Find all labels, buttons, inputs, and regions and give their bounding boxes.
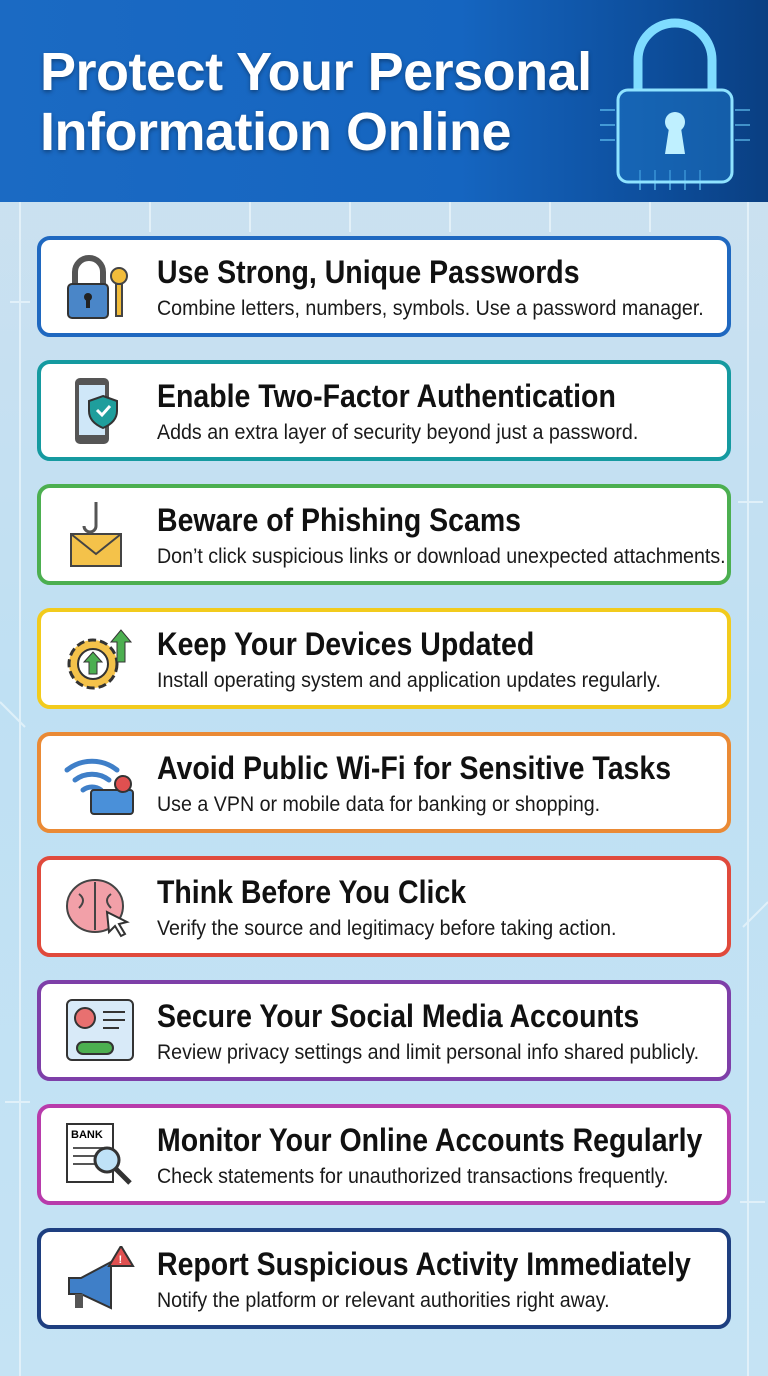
card 3: phishing <box>37 484 731 585</box>
icon: gear with arrows <box>68 629 132 690</box>
icon: wifi and card <box>64 758 134 815</box>
heading: Monitor Your Online Accounts Regularly <box>157 1122 702 1158</box>
icon: hook and envelope <box>70 502 122 567</box>
heading: Beware of Phishing Scams <box>157 502 521 538</box>
card 9: report <box>37 1228 731 1329</box>
heading: Enable Two-Factor Authentication <box>157 378 616 414</box>
heading: Keep Your Devices Updated <box>157 626 534 662</box>
card 6: think <box>37 856 731 957</box>
description: Review privacy settings and limit personal info shared publicly. <box>157 1041 699 1064</box>
title: Information Online <box>40 102 511 162</box>
icon: phone with shield <box>75 378 118 444</box>
description: Use a VPN or mobile data for banking or shopping. <box>157 793 600 816</box>
icon: digital padlock <box>600 18 750 190</box>
description: Verify the source and legitimacy before taking action. <box>157 917 617 940</box>
description: Check statements for unauthorized transactions frequently. <box>157 1165 669 1188</box>
header <box>0 0 768 202</box>
heading: Think Before You Click <box>157 874 466 910</box>
description: Combine letters, numbers, symbols. Use a password manager. <box>157 297 704 320</box>
description: Install operating system and application updates regularly. <box>157 669 661 692</box>
title: Protect Your Personal <box>40 42 592 102</box>
description: Notify the platform or relevant authorities right away. <box>157 1289 610 1312</box>
heading: Report Suspicious Activity Immediately <box>157 1246 691 1282</box>
card 4: updates <box>37 608 731 709</box>
icon: bank statement with magnifier: BANK <box>71 1129 103 1141</box>
card 5: wifi <box>37 732 731 833</box>
card 2: 2FA <box>37 360 731 461</box>
title <box>40 42 592 162</box>
heading: Secure Your Social Media Accounts <box>157 998 639 1034</box>
description: Adds an extra layer of security beyond just a password. <box>157 421 638 444</box>
heading: Avoid Public Wi-Fi for Sensitive Tasks <box>157 750 671 786</box>
card 8: monitor <box>37 1104 731 1205</box>
icon: profile card with toggle <box>66 999 134 1061</box>
icon: padlock and key <box>67 255 128 319</box>
description: Don’t click suspicious links or download unexpected attachments. <box>157 545 726 568</box>
icon: brain with cursor <box>66 879 130 938</box>
card 1: passwords <box>37 236 731 337</box>
icon: megaphone with warning: ! <box>118 1254 122 1266</box>
icon: bank statement with magnifier <box>66 1123 132 1185</box>
icon: megaphone with warning <box>68 1246 135 1310</box>
card 7: social <box>37 980 731 1081</box>
heading: Use Strong, Unique Passwords <box>157 254 580 290</box>
